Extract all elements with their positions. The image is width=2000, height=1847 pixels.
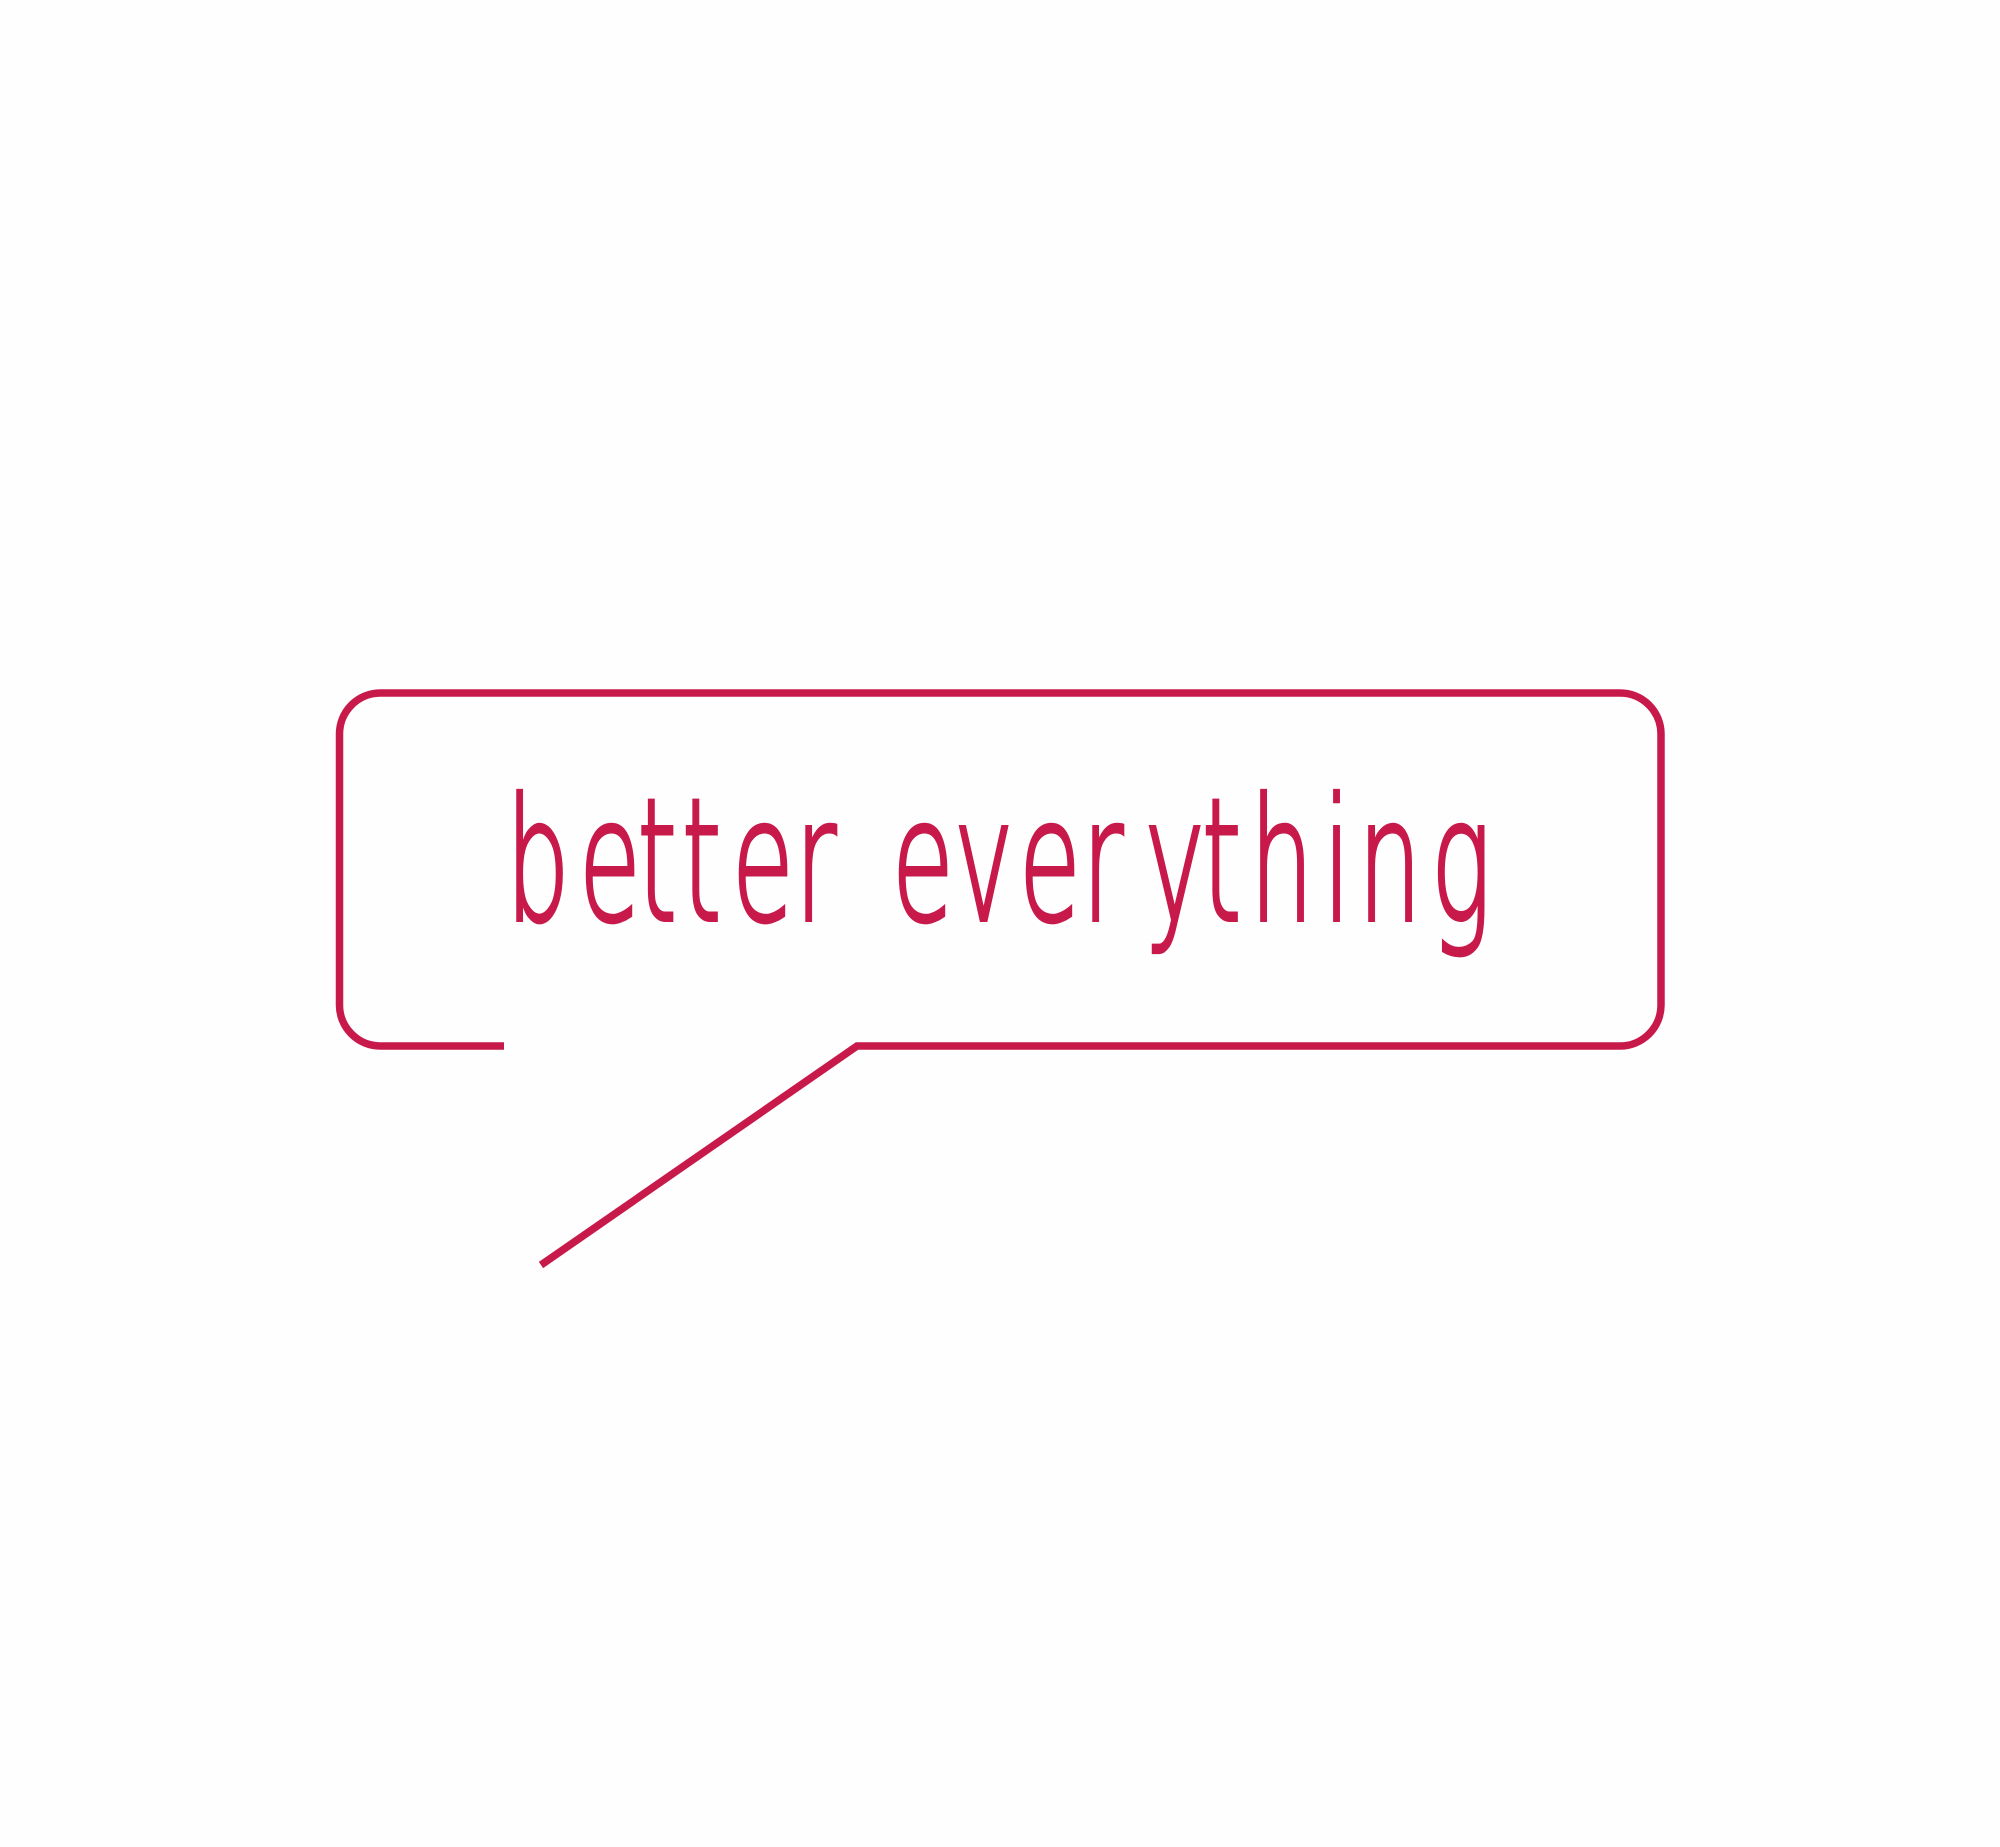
speech bubble outline with tail [339, 693, 1661, 1265]
wordmark text: better everything [506, 762, 1491, 960]
